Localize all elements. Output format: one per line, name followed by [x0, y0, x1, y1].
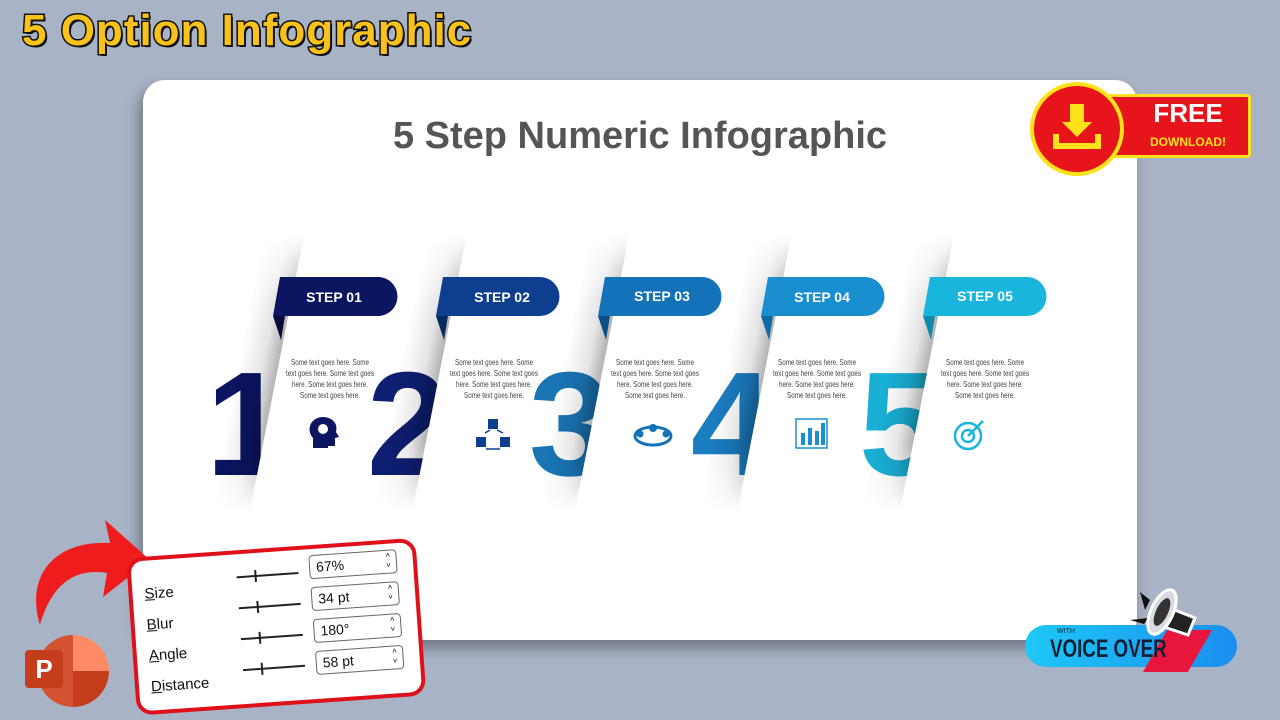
step 2: Some text goes here.	[464, 390, 524, 400]
icon: download circle	[1030, 82, 1124, 176]
step 1: STEP 01	[306, 289, 362, 305]
step 2: Some text goes here. Some	[455, 357, 533, 367]
step 1: 1	[206, 342, 288, 507]
slide heading: 5 Step Numeric Infographic	[393, 115, 887, 157]
shadow settings panel	[126, 538, 426, 716]
shadow settings panel: 58 pt	[322, 652, 354, 671]
step 3: Some text goes here.	[625, 390, 685, 400]
step 1: Some text goes here. Some	[291, 357, 369, 367]
step 5: Some text goes here. Some	[946, 357, 1024, 367]
step 4: 4	[691, 342, 773, 507]
shadow settings panel: Size	[144, 584, 174, 603]
free download badge: DOWNLOAD!	[1150, 135, 1226, 149]
step 4: here. Some text goes here.	[779, 379, 855, 389]
step 3: text goes here. Some text goes	[611, 368, 699, 378]
step 4: STEP 04	[794, 289, 850, 305]
step 1: here. Some text goes here.	[292, 379, 368, 389]
shadow settings panel: 180°	[320, 621, 350, 639]
icon: head with bulb	[310, 417, 339, 448]
main title: 5 Option Infographic	[22, 6, 472, 55]
shadow settings panel: Angle	[148, 645, 188, 665]
shadow settings panel: Blur	[146, 615, 174, 634]
step 1: Some text goes here.	[300, 390, 360, 400]
step 2: 2	[367, 342, 449, 507]
step 3: here. Some text goes here.	[617, 379, 693, 389]
free download badge: FREE	[1153, 98, 1223, 128]
step 4: Some text goes here. Some	[778, 357, 856, 367]
step 5: here. Some text goes here.	[947, 379, 1023, 389]
step 2: STEP 02	[474, 289, 530, 305]
shadow settings panel: 34 pt	[318, 589, 350, 607]
step 3: Some text goes here. Some	[616, 357, 694, 367]
voice over badge: WITH	[1057, 628, 1075, 635]
step 4: Some text goes here.	[787, 390, 847, 400]
icon: team circle	[635, 424, 671, 445]
step 5	[863, 242, 1046, 502]
icon: cubes	[476, 419, 510, 449]
step 3	[532, 242, 722, 502]
step 4	[693, 242, 884, 502]
free download badge	[1030, 82, 1251, 176]
step 2: here. Some text goes here.	[456, 379, 532, 389]
step 2: text goes here. Some text goes	[450, 368, 538, 378]
step 5: text goes here. Some text goes	[941, 368, 1029, 378]
voice over badge: VOICE OVER!	[1050, 635, 1173, 663]
step 5: Some text goes here.	[955, 390, 1015, 400]
icon: powerpoint: P	[35, 654, 53, 684]
voice over badge	[1025, 588, 1237, 672]
step 4: text goes here. Some text goes	[773, 368, 861, 378]
icon: megaphone	[1130, 588, 1197, 637]
step 5: STEP 05	[957, 288, 1013, 304]
step 5: 5	[859, 342, 941, 507]
step 1	[215, 242, 398, 502]
step 2	[372, 242, 560, 502]
icon: powerpoint	[25, 635, 109, 707]
shadow settings panel: 67%	[316, 557, 345, 575]
card	[143, 80, 1137, 640]
icon: target	[955, 421, 983, 449]
icon: bar chart	[796, 419, 827, 448]
banner	[1098, 94, 1251, 158]
arrow: red curved	[36, 520, 146, 625]
step 3: 3	[529, 342, 611, 507]
shadow settings panel: Distance	[150, 675, 210, 696]
step 3: STEP 03	[634, 288, 690, 304]
steps diagram	[215, 242, 1046, 502]
step 1: text goes here. Some text goes	[286, 368, 374, 378]
